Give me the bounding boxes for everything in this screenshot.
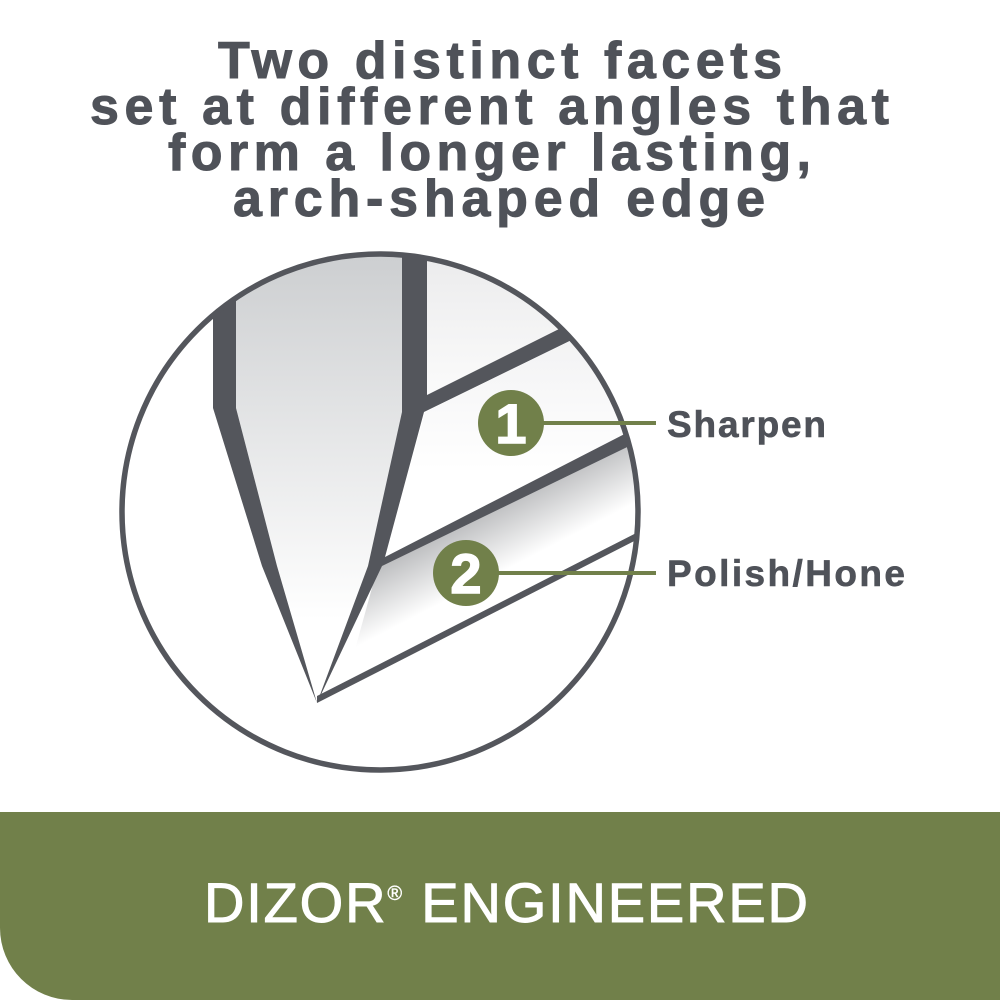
footer text: ENGINEERED: [404, 871, 808, 934]
callout 2: polish/hone: 2: [450, 542, 482, 605]
callout 2: polish/hone: [433, 540, 905, 606]
title: Two distinct facets: [218, 32, 782, 90]
blade and facets: [213, 240, 654, 703]
title: arch-shaped edge: [233, 170, 765, 228]
callout 1: sharpen: 1: [495, 392, 527, 455]
footer band: [0, 812, 1000, 1000]
blade outline strokes: [213, 301, 317, 703]
title: form a longer lasting,: [168, 124, 811, 182]
facet 2: polish/hone: [359, 447, 634, 638]
footer text: DIZOR: [204, 871, 386, 934]
blade body fill: [236, 256, 402, 562]
callout 1: sharpen: Sharpen: [667, 404, 826, 445]
title: set at different angles that: [90, 78, 889, 136]
footer text: ®: [387, 883, 402, 905]
circle background: [122, 254, 638, 770]
circle outline: [122, 254, 638, 770]
callout 1: sharpen: [478, 390, 826, 456]
top facet: [427, 261, 558, 358]
callout 2: polish/hone: Polish/Hone: [667, 553, 905, 594]
title: [90, 32, 889, 228]
facet 1: sharpen: [481, 342, 600, 386]
diagram: knife edge cross-section in a circle: [122, 240, 654, 770]
